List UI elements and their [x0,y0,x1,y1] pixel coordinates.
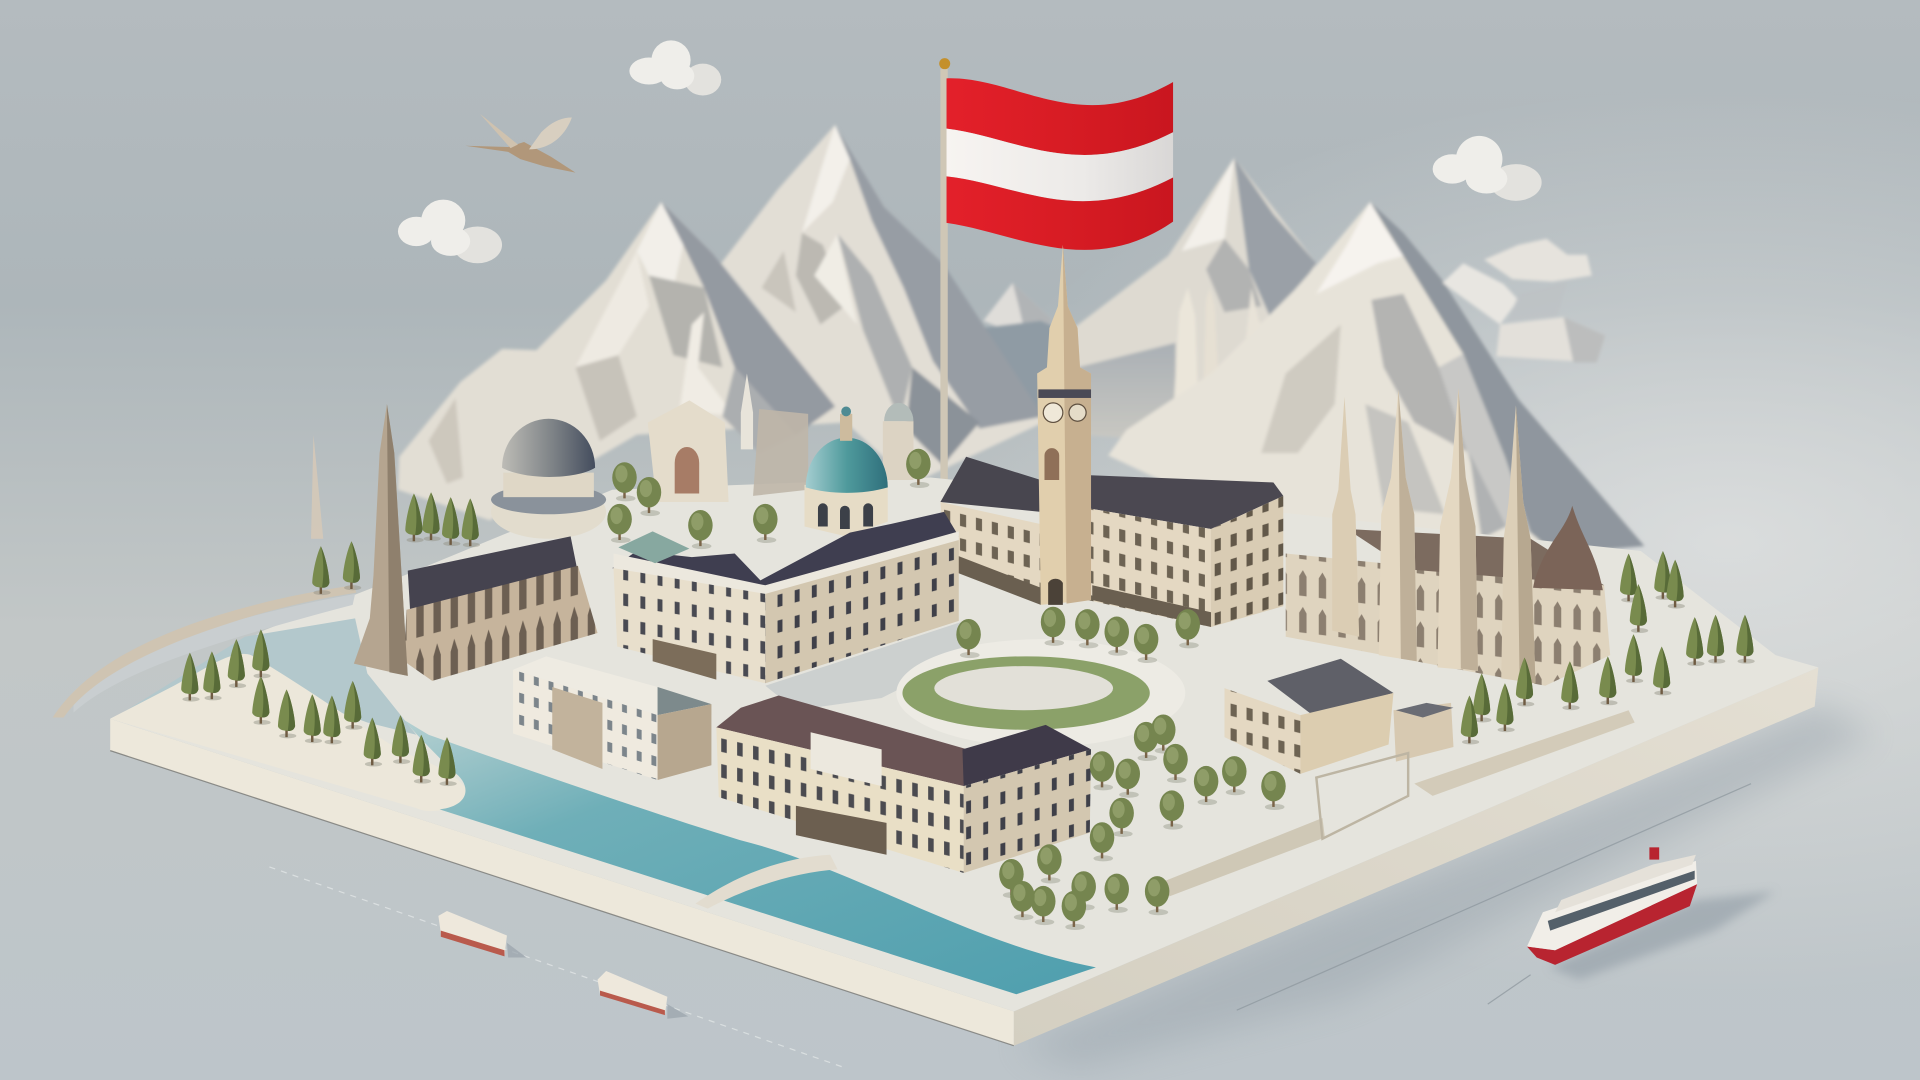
nave roof [1347,529,1604,585]
clock tower [1037,245,1091,605]
small government building [1224,659,1453,774]
theatre roof [513,656,658,715]
lower palace side [964,749,1091,873]
ship upper deck [1555,855,1696,912]
observatory drum [503,473,594,497]
town hall right roof [1087,475,1283,529]
lower palace roof [716,696,967,786]
trees: garden grove [956,607,1286,930]
distant spire [311,435,323,539]
cathedral roof [408,536,578,612]
flag pole [940,69,948,497]
observatory dome building [491,419,606,539]
theatre columns [552,687,602,769]
lower palace front [716,727,964,873]
fountain basin [934,666,1113,710]
palace cast shadow [765,622,980,710]
platform [110,478,1818,1046]
palace entrance [796,806,887,855]
town hall: Rathaus with clock tower [940,245,1283,627]
cloud: right [1433,136,1542,201]
plaza paving [896,639,1185,747]
town hall right front wing [1087,508,1211,627]
small boat: front [598,971,688,1019]
theatre front facade [513,670,658,780]
trees: left shore [181,629,457,786]
observatory plinth [491,485,606,539]
wake lines on the water [269,784,1751,1068]
mountain: front left peak [398,202,845,520]
platform top [110,478,1818,1011]
trees: behind central palace [312,449,931,595]
cathedral tower [354,404,408,676]
road and fence on right [1163,710,1635,896]
ship shadow [1549,891,1776,980]
cloud: left [398,200,502,263]
cloud: top centre [629,40,721,96]
central palace: Hofburg with green dome [612,407,959,683]
palace balustrade [613,531,959,595]
river [404,720,1096,994]
cathedral wall [404,566,598,681]
palace side wall [765,540,959,683]
theatre side facade [658,704,711,780]
gothic spires [1332,388,1536,683]
town hall left roof [940,457,1041,512]
small boat: near shore [438,911,527,958]
mountains [398,125,1644,553]
flag cloth [947,78,1173,250]
neo-gothic cathedral with four spires [1286,388,1610,686]
mountain: rear right peak [1053,158,1316,453]
platform shadow [1016,704,1873,1068]
palace front wall [613,568,765,683]
icon: dragonfly [465,114,576,173]
arcade [1092,585,1211,627]
town hall left wing [940,502,1041,602]
central risalit [811,732,882,786]
nave wall [1286,553,1610,686]
bridge: small river crossing [696,855,838,909]
theatre building [513,656,711,780]
mountain: front right peak [1108,202,1644,553]
rear palace with arch [648,373,913,502]
cathedral: Stephansdom with tower [354,404,598,681]
trees: right edge [1461,551,1755,744]
platform left side [110,719,1014,1046]
green dome [804,407,888,536]
ship hull [1527,884,1697,965]
palace roof [612,512,959,593]
mountain: far right cloud-wrapped peak [1442,239,1605,362]
left shore sand [110,654,468,811]
apse dome [1533,506,1603,590]
ship lower deck [1527,861,1697,950]
fountain green ring [902,656,1150,730]
mountain: distant small peak [980,283,1078,416]
portico [653,639,716,680]
bridge: left arched viaduct [53,585,356,718]
platform right side [1014,667,1818,1046]
observatory globe [502,419,595,477]
plaza [765,622,1185,747]
flag: Austrian flag on pole [939,58,1173,497]
Schönbrunn-style palace [716,696,1091,873]
cruise ship [1527,847,1697,965]
town hall right side wing [1211,496,1283,627]
mountain: rear left peak [721,125,1043,484]
glass pavilion roof [618,531,689,563]
pale water behind the bridge [122,618,416,735]
ship window band [1548,871,1695,931]
